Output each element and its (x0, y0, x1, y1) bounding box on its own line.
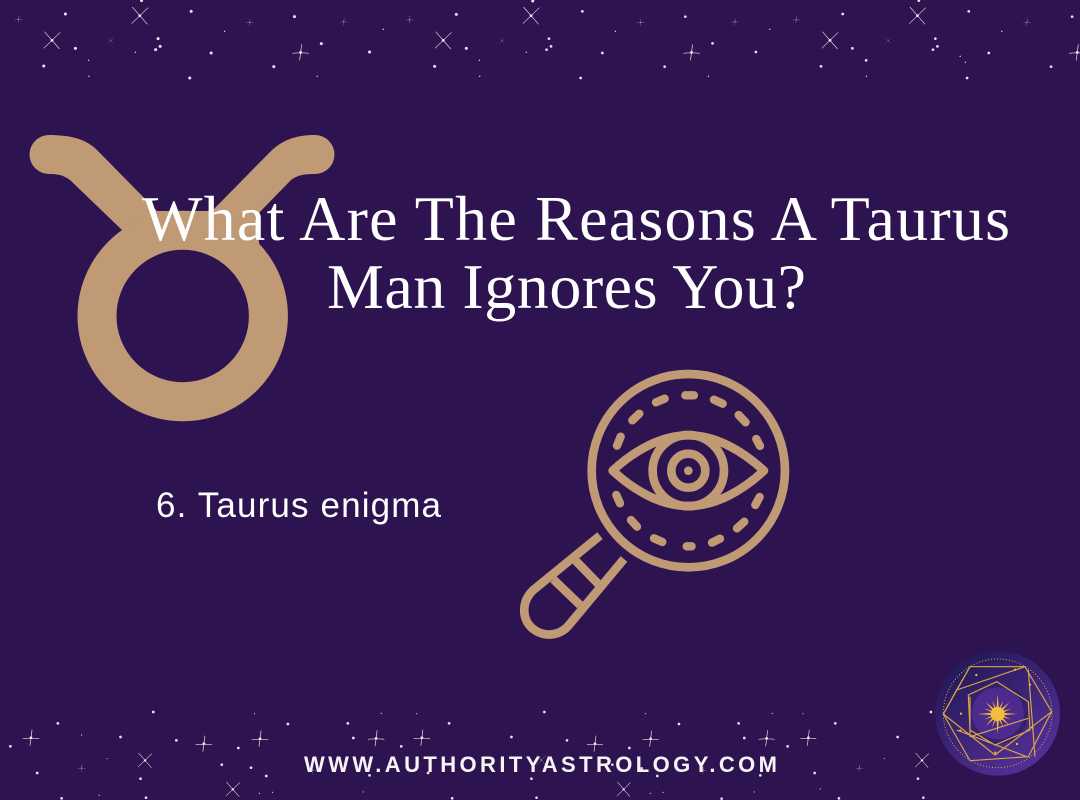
icon: magnifying glass with eye (524, 374, 785, 635)
iris (653, 435, 724, 506)
eye outline (613, 435, 764, 506)
starfield: top left (15, 1, 539, 78)
inner iris ring (671, 454, 705, 488)
handle grip bands (553, 560, 598, 605)
lens ring (592, 374, 785, 567)
handle (524, 536, 624, 635)
website url: WWW.AUTHORITYASTROLOGY.COM (304, 752, 777, 777)
geometric lines (943, 667, 1052, 761)
icon: Taurus symbol (30, 135, 334, 402)
starfield: bottom right (537, 712, 931, 799)
central disc halo (967, 683, 1028, 744)
pupil (684, 466, 693, 475)
small gold ornaments (960, 670, 1032, 753)
badge disc (935, 651, 1060, 776)
central disc (972, 687, 1024, 739)
subheading: 6. Taurus enigma (156, 486, 442, 525)
title: What Are The Reasons A Taurus (142, 183, 1010, 254)
dashed inner ring (616, 395, 760, 546)
starfield: bottom left (10, 712, 537, 798)
horns (30, 135, 334, 260)
logo badge (935, 651, 1060, 776)
starfield: top right (547, 1, 1080, 78)
title (142, 183, 1010, 322)
sun rays (974, 690, 1021, 738)
title: Man Ignores You? (327, 251, 806, 322)
dotted ring (943, 659, 1052, 768)
ring (97, 230, 268, 402)
